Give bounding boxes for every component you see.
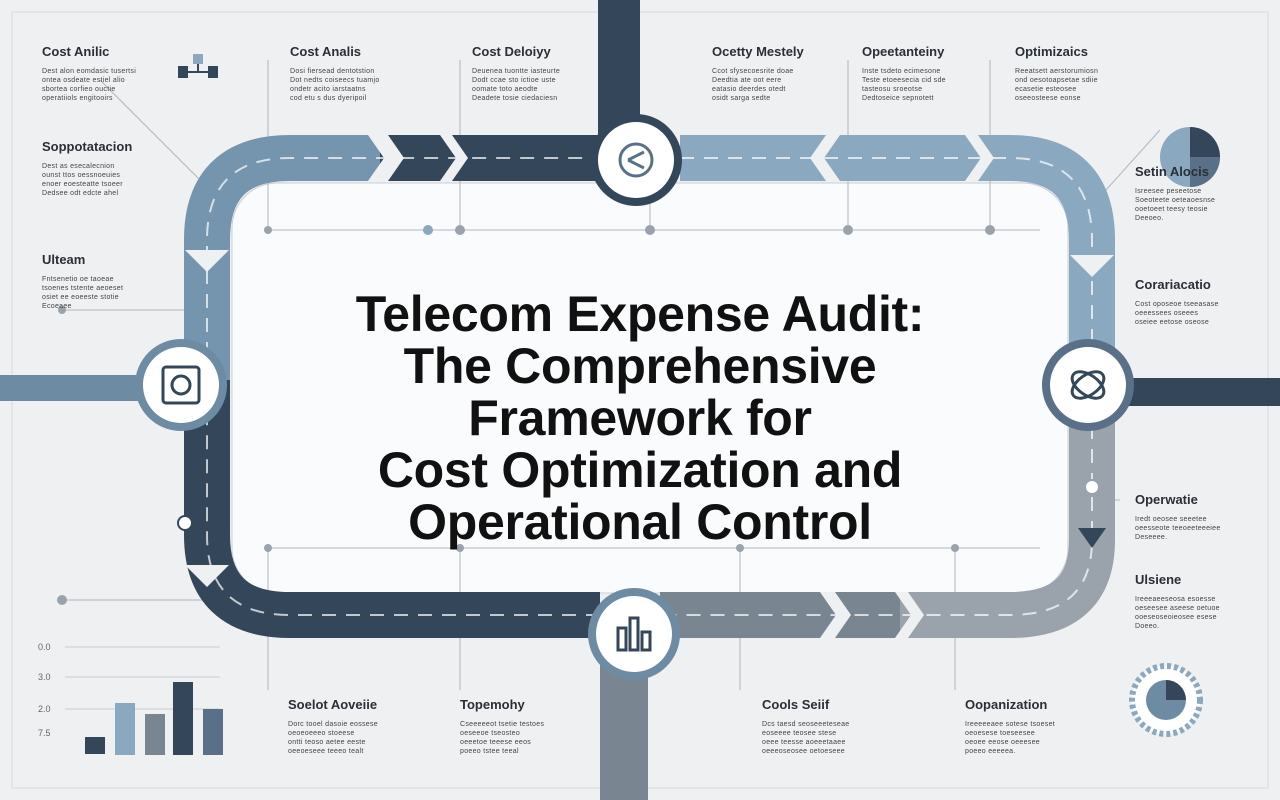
text: Soelot Aoveiie xyxy=(288,697,378,755)
text: Cost Anilic: Cost Anilic xyxy=(42,44,109,59)
text: Cools Seiif: eoseeee teosee stese xyxy=(762,730,836,737)
title: Framework for xyxy=(468,390,812,446)
text: Cools Seiif: oeeeoseosee oetoeseee xyxy=(762,748,845,755)
icon: left circle xyxy=(136,339,227,431)
text: Topemohy xyxy=(460,697,544,755)
bar chart: 2.0 xyxy=(38,704,51,714)
text: Ocetty Mestely: Ccot sfysecoesrite doae xyxy=(712,68,794,75)
text: Topemohy: poeeo tstee teeal xyxy=(460,748,519,755)
text: Opeetanteiny: tasteosu sroeotse xyxy=(862,86,922,93)
text: Corariacatio xyxy=(1135,277,1219,326)
icon: top circle xyxy=(592,114,682,206)
text: Ulteam: osiet ee eoeeste stotie xyxy=(42,294,119,301)
text: Cools Seiif: Cools Seiif xyxy=(762,697,829,712)
text: Corariacatio: oseiee eetose oseose xyxy=(1135,319,1209,326)
text: Soelot Aoveiie: Dorc tooel dasoie eossese xyxy=(288,721,378,728)
text: Cost Anilic: sbortea corfieo ouctie xyxy=(42,86,116,93)
text: Setin Alocis: ooetoeet teesy teosie xyxy=(1135,206,1208,213)
text: Cost Anilic: operatiiols engitooirs xyxy=(42,95,113,102)
text: Cost Deloiyy: Cost Deloiyy xyxy=(472,44,551,59)
text: Cost Analis: cod etu s dus dyeripoil xyxy=(290,95,367,102)
text: Operwatie: Iredt oeosee seeetee xyxy=(1135,516,1207,523)
text: Cost Analis: Dot nedts coiseecs tuamjo xyxy=(290,77,380,84)
text: Cost Analis: ondetr acito iarstaatns xyxy=(290,86,366,93)
text: Cost Anilic xyxy=(42,44,136,102)
text: Soppotatacion: Soppotatacion xyxy=(42,139,132,154)
text: Soppotatacion xyxy=(42,139,132,197)
text: Opeetanteiny: Inste tsdeto ecimesone xyxy=(862,68,941,75)
text: Setin Alocis: Soeoteete oeteaoesnse xyxy=(1135,197,1215,204)
text: Soppotatacion: ounst ttos oessnoeuies xyxy=(42,172,120,179)
text: Topemohy: Topemohy xyxy=(460,697,525,712)
text: Ocetty Mestely: Deedtia ate oot eere xyxy=(712,77,781,84)
text: Ulteam: Fntsenetio oe taoeae xyxy=(42,276,114,283)
text: Oopanization: oeoesese toeseesee xyxy=(965,730,1035,737)
text: Cost Deloiyy xyxy=(472,44,560,102)
text: Ulsiene: Doeeo. xyxy=(1135,623,1159,630)
text: Cools Seiif: Dcs taesd seoseeeteseae xyxy=(762,721,849,728)
text: Ocetty Mestely xyxy=(712,44,804,102)
text: Cost Analis: Cost Analis xyxy=(290,44,361,59)
text: Oopanization: Ireeeeeaee sotese tsoeset xyxy=(965,721,1055,728)
text: Cost Deloiyy: oomate toto aeodte xyxy=(472,86,538,93)
text: Soelot Aoveiie: ontti teoso aetee eeste xyxy=(288,739,366,746)
icon: gauge bottom right xyxy=(1129,663,1203,737)
text: Ulsiene: Ulsiene xyxy=(1135,572,1181,587)
bar chart: 3.0 xyxy=(38,672,51,682)
text: Oopanization: oeoee eeose oeeesee xyxy=(965,739,1040,746)
text: Oopanization xyxy=(965,697,1055,755)
text: Ulsiene: ooeseoseoieosee esese xyxy=(1135,614,1217,621)
icon: right circle xyxy=(1042,339,1134,431)
text: Optimizaics: Reeatsett aerstorumiosn xyxy=(1015,68,1098,75)
text: Ulteam: Ulteam xyxy=(42,252,85,267)
text: Cost Deloiyy: Deadete tosie ciedaciesn xyxy=(472,95,557,102)
title: Telecom Expense Audit: xyxy=(356,286,924,342)
text: Oopanization: Oopanization xyxy=(965,697,1047,712)
text: Cost Deloiyy: Dodt ccae sto ictioe uste xyxy=(472,77,556,84)
text: Optimizaics: ond oesotoapsetae sdiie xyxy=(1015,77,1098,84)
text: Opeetanteiny xyxy=(862,44,946,102)
text: Opeetanteiny: Dedtoseice sepnotett xyxy=(862,95,934,102)
bar chart xyxy=(38,642,223,755)
text: Cost Analis: Dosi fiersead dentotstion xyxy=(290,68,375,75)
text: Soppotatacion: Dedsee odt edcte ahel xyxy=(42,190,118,197)
text: Ulteam xyxy=(42,252,123,310)
text: Opeetanteiny: Teste etoeesecia cid sde xyxy=(862,77,946,84)
text: Topemohy: oeeetoe teeese eeos xyxy=(460,739,531,746)
text: Soppotatacion: Dest as esecalecnion xyxy=(42,163,115,170)
text: Cools Seiif: oeee teesse aoeeetaaee xyxy=(762,739,846,746)
text: Optimizaics: oseeosteese eonse xyxy=(1015,95,1081,102)
text: Optimizaics xyxy=(1015,44,1098,102)
text: Ulteam: Ecoeaee xyxy=(42,303,72,310)
text: Topemohy: oeseeoe tseosteo xyxy=(460,730,520,737)
text: Ulsiene xyxy=(1135,572,1220,630)
text: Ocetty Mestely: osidt sarga sedte xyxy=(712,95,770,102)
text: Cost Anilic: ontea osdeate estiel alio xyxy=(42,77,125,84)
text: Ulsiene: oeseesee aseese oetuoe xyxy=(1135,605,1220,612)
text: Cost Anilic: Dest alon eomdasic tusertsi xyxy=(42,68,136,75)
bar chart: 0.0 xyxy=(38,642,51,652)
text: Operwatie xyxy=(1135,492,1221,541)
text: Optimizaics: ecasetie esteosee xyxy=(1015,86,1077,93)
text: Corariacatio: Corariacatio xyxy=(1135,277,1211,292)
text: Soelot Aoveiie: oeeoeseee teeeo tealt xyxy=(288,748,364,755)
bar chart: 7.5 xyxy=(38,728,51,738)
text: Setin Alocis: Setin Alocis xyxy=(1135,164,1209,179)
text: Operwatie: Operwatie xyxy=(1135,492,1198,507)
title xyxy=(356,286,924,550)
text: Ocetty Mestely: eatasio deerdes otedt xyxy=(712,86,786,93)
text: Cools Seiif xyxy=(762,697,849,755)
text: Ulsiene: Ireeeaeeseosa esoesse xyxy=(1135,596,1216,603)
text: Cost Deloiyy: Deuenea tuontte iasteurte xyxy=(472,68,560,75)
text: Soelot Aoveiie: oeoeoeeeo stoeese xyxy=(288,730,355,737)
text: Optimizaics: Optimizaics xyxy=(1015,44,1088,59)
text: Setin Alocis xyxy=(1135,164,1215,222)
text: Soelot Aoveiie: Soelot Aoveiie xyxy=(288,697,377,712)
text: Operwatie: Deseeee. xyxy=(1135,534,1167,541)
title: Operational Control xyxy=(408,494,872,550)
icon: network top left xyxy=(178,54,218,78)
text: Opeetanteiny: Opeetanteiny xyxy=(862,44,944,59)
text: Topemohy: Cseeeeeot tsetie testoes xyxy=(460,721,544,728)
text: Soppotatacion: enoer eoesteatte tsoeer xyxy=(42,181,123,188)
title: Cost Optimization and xyxy=(378,442,902,498)
text: Operwatie: oeesseote teeoeeteeeiee xyxy=(1135,525,1221,532)
text: Setin Alocis: Deeoeo. xyxy=(1135,215,1164,222)
text: Oopanization: poeeo eeeeea. xyxy=(965,748,1016,755)
icon: pie top right xyxy=(1160,127,1220,187)
title: The Comprehensive xyxy=(404,338,876,394)
text: Corariacatio: oeeessees oseees xyxy=(1135,310,1198,317)
text: Setin Alocis: Isreesee peseetose xyxy=(1135,188,1202,195)
text: Ulteam: tsoenes tstente aeoeset xyxy=(42,285,123,292)
text: Corariacatio: Cost oposeoe tseeasase xyxy=(1135,301,1219,308)
text: Ocetty Mestely: Ocetty Mestely xyxy=(712,44,804,59)
text: Cost Analis xyxy=(290,44,380,102)
icon: bottom circle xyxy=(588,588,680,680)
